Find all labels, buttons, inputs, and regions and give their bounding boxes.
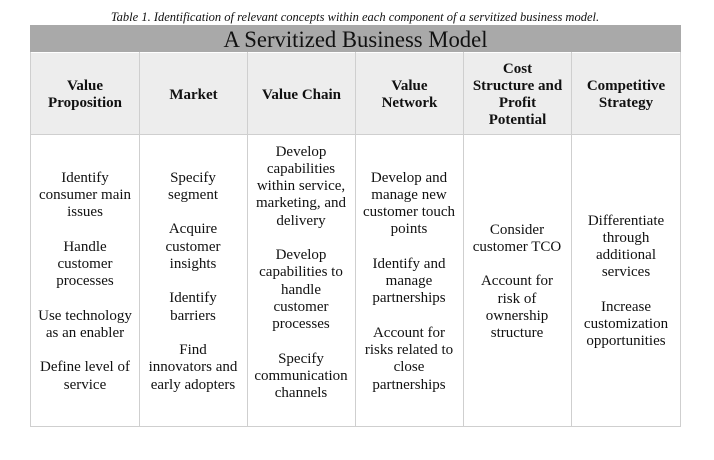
column text: Value Proposition <box>38 170 132 392</box>
header: Competitive Strategy <box>572 53 680 134</box>
column text: Value Network: points <box>391 221 427 237</box>
column text: Value Network: Account for <box>373 325 445 341</box>
column text: Market: segment <box>168 187 218 203</box>
column text: Value Network: Identify and <box>373 256 445 272</box>
header: Value Proposition: Value <box>67 78 103 94</box>
header: Cost Structure and Profit Potential <box>464 53 571 134</box>
column text: Market: early adopters <box>151 376 235 392</box>
column text: Value Chain: Develop <box>276 144 326 160</box>
header: Cost Structure and Profit Potential: Potential <box>489 112 546 128</box>
column text: Value Proposition: as an enabler <box>46 325 124 341</box>
header: Value Proposition: Proposition <box>48 95 122 111</box>
column text: Value Chain <box>254 144 348 401</box>
column text: Value Proposition: customer <box>58 256 112 272</box>
column text: Market: Identify <box>169 290 217 306</box>
header: Value Network: Value <box>391 78 428 94</box>
column text: Value Network: Develop and <box>371 170 447 186</box>
column text: Value Proposition: Use technology <box>38 308 132 324</box>
header: Competitive Strategy: Strategy <box>599 95 653 111</box>
column text: Value Chain: Develop <box>276 247 326 263</box>
column text: Market: Specify <box>170 170 216 186</box>
table title band <box>30 25 681 52</box>
column text: Competitive Strategy: through <box>603 230 649 246</box>
column text: Market <box>148 170 238 392</box>
header: Value Chain: Value Chain <box>262 86 341 102</box>
column text: Value Network: manage new <box>371 187 447 203</box>
column text: Value Chain: capabilities to <box>259 264 343 280</box>
column text: Market: Find <box>179 342 207 358</box>
column text: Value Chain: within service, <box>257 178 345 194</box>
header: Market <box>140 53 247 134</box>
column text: Value Network <box>363 170 455 392</box>
column text: Market: customer <box>166 238 220 254</box>
column text: Value Chain: delivery <box>276 212 326 228</box>
column text: Value Network: manage <box>386 273 432 289</box>
column text: Value Chain: channels <box>275 385 327 401</box>
header: Value Network: Network <box>382 95 437 111</box>
column text: Value Proposition: Define level of <box>40 359 130 375</box>
column text: Value Network: partnerships <box>372 290 446 306</box>
header: Value Proposition <box>31 53 139 134</box>
column text: Value Chain: communication <box>254 368 348 384</box>
column text: Competitive Strategy: Differentiate <box>588 212 664 228</box>
header: Cost Structure and Profit Potential: Cost <box>503 61 532 77</box>
column text: Value Proposition: consumer main <box>39 187 131 203</box>
column text: Competitive Strategy: additional <box>596 247 656 263</box>
column text: Market: barriers <box>170 308 216 324</box>
header: Cost Structure and Profit Potential: Profit <box>499 95 536 111</box>
header: Competitive Strategy: Competitive <box>587 78 665 94</box>
column text: Market: innovators and <box>149 359 237 375</box>
column text: Cost Structure and Profit Potential: structure <box>491 325 543 341</box>
column text: Value Chain: handle <box>281 282 321 298</box>
column text: Value Network: partnerships <box>372 376 446 392</box>
column text: Value Proposition: Handle <box>63 238 107 254</box>
header: Value Network <box>356 53 463 134</box>
column text: Competitive Strategy <box>584 212 668 349</box>
column text: Value Chain: capabilities <box>267 161 335 177</box>
column text: Value Proposition: issues <box>67 204 103 220</box>
table caption: Table 1. Identification of relevant concepts within each component of a servitized business model. <box>111 10 599 24</box>
column text: Cost Structure and Profit Potential: Consider <box>490 222 544 238</box>
header: Value Chain <box>248 53 355 134</box>
column text: Cost Structure and Profit Potential: customer TCO <box>473 239 561 255</box>
column text: Competitive Strategy: customization <box>584 316 668 332</box>
column text: Competitive Strategy: opportunities <box>586 333 666 349</box>
column text: Market: insights <box>170 256 216 272</box>
column text: Market: Acquire <box>169 221 217 237</box>
table title band: A Servitized Business Model <box>223 27 488 52</box>
column text: Cost Structure and Profit Potential: risk of <box>498 290 536 306</box>
column text: Value Network: risks related to <box>365 342 453 358</box>
column text: Cost Structure and Profit Potential <box>473 222 561 341</box>
column text: Cost Structure and Profit Potential: ownership <box>486 308 548 324</box>
column text: Cost Structure and Profit Potential: Account for <box>481 273 553 289</box>
column text: Value Network: close <box>394 359 424 375</box>
column text: Value Proposition: Identify <box>61 170 109 186</box>
column text: Value Proposition: service <box>64 376 106 392</box>
header: Market: Market <box>169 86 218 102</box>
column text: Value Chain: customer <box>274 299 328 315</box>
column text: Competitive Strategy: services <box>602 264 650 280</box>
header: Cost Structure and Profit Potential: Structure and <box>473 78 562 94</box>
column text: Value Network: customer touch <box>363 204 455 220</box>
column text: Value Proposition: processes <box>56 273 114 289</box>
column text: Value Chain: Specify <box>278 350 324 366</box>
column text: Value Chain: marketing, and <box>256 195 346 211</box>
column text: Value Chain: processes <box>272 316 330 332</box>
column text: Competitive Strategy: Increase <box>601 299 651 315</box>
